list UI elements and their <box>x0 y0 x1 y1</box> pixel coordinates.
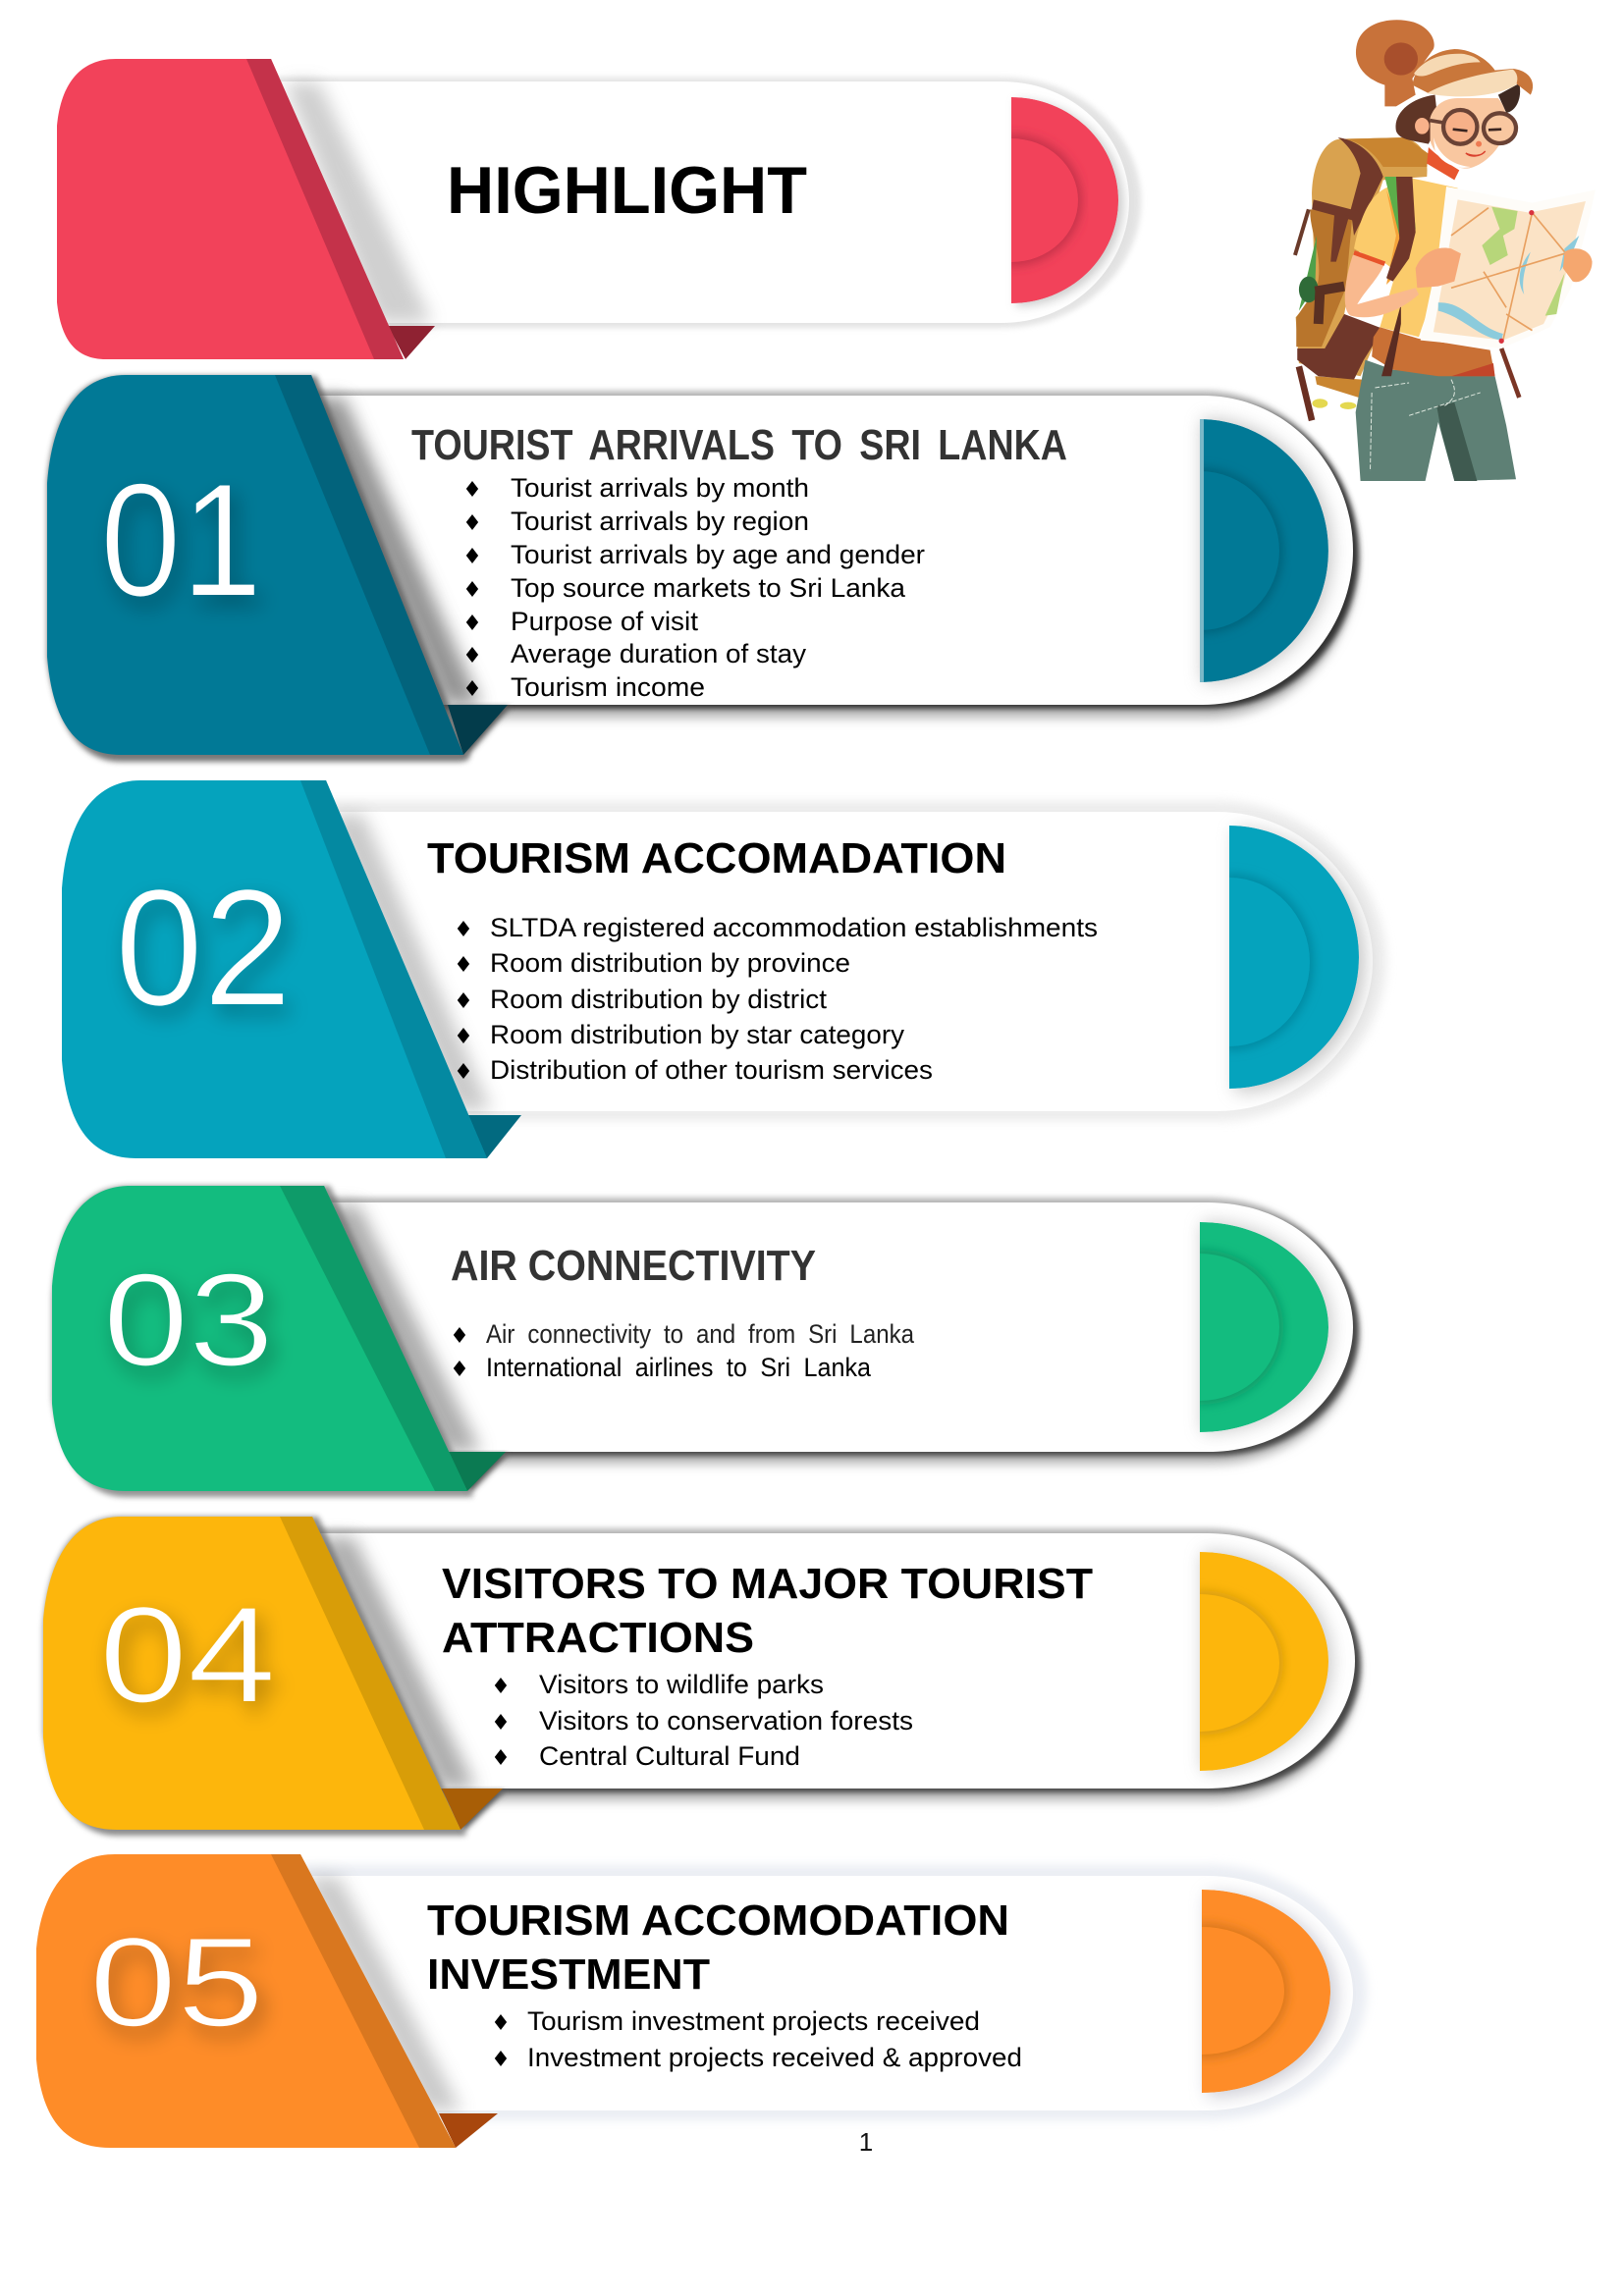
hands <box>1416 247 1593 288</box>
half disc: teal <box>1200 419 1328 682</box>
list: tourist arrivals: ♦ <box>462 478 482 503</box>
panel: 03 air connectivity <box>52 1186 1359 1497</box>
list: tourist arrivals: ♦ <box>462 545 482 569</box>
list: tourist arrivals: Top source markets to Sri Lanka <box>511 573 906 603</box>
heading: major tourist attractions <box>442 1560 1093 1662</box>
head with bun, hat and glasses <box>1356 20 1533 180</box>
list: accommodation investment: Investment projects received & approved <box>527 2043 1022 2072</box>
heading: accommodation investment: TOURISM ACCOMODATION <box>427 1896 1009 1945</box>
list: tourism accommodation: Distribution of other tourism services <box>490 1055 933 1085</box>
tab: yellow <box>43 1517 460 1830</box>
list: tourist arrivals: Tourist arrivals by region <box>511 507 809 536</box>
list: tourist arrivals: ♦ <box>462 644 482 668</box>
list: air connectivity <box>450 1319 915 1382</box>
list: tourist arrivals: Purpose of visit <box>511 607 699 636</box>
list: tourism accommodation: ♦ <box>454 918 473 942</box>
half disc: orange <box>1202 1890 1330 2093</box>
tab: orange <box>36 1854 456 2148</box>
shirt and belt <box>1345 177 1519 398</box>
list: accommodation investment: ♦ <box>491 2011 511 2036</box>
list: accommodation investment <box>491 2006 1022 2072</box>
number: 04: 04 <box>99 1577 276 1732</box>
tab: cyan <box>62 780 487 1158</box>
list: major tourist attractions <box>491 1670 913 1771</box>
heading: major tourist attractions: VISITORS TO MAJOR TOURIST <box>442 1560 1093 1608</box>
list: tourist arrivals: ♦ <box>462 511 482 536</box>
list: tourism accommodation: Room distribution by province <box>490 948 850 978</box>
number: 03: 03 <box>103 1246 274 1394</box>
number: 05: 05 <box>89 1910 264 2054</box>
panel: highlight banner <box>57 59 1141 359</box>
panel: 05 accommodation investment <box>36 1854 1367 2148</box>
list: accommodation investment: Tourism investment projects received <box>527 2006 980 2036</box>
list: tourism accommodation: ♦ <box>454 1025 473 1049</box>
list: major tourist attractions: Central Cultural Fund <box>539 1741 800 1771</box>
list: tourist arrivals: Average duration of stay <box>511 639 806 668</box>
number: 02: 02 <box>115 855 292 1041</box>
tab: green <box>52 1186 467 1491</box>
map <box>1421 187 1596 348</box>
list: tourist arrivals <box>462 473 925 702</box>
list: accommodation investment: ♦ <box>491 2048 511 2072</box>
list: tourism accommodation: Room distribution by star category <box>490 1020 905 1049</box>
list: tourism accommodation: SLTDA registered accommodation establishments <box>490 913 1098 942</box>
list: air connectivity: Air connectivity to and from Sri Lanka <box>486 1319 915 1349</box>
list: tourist arrivals: ♦ <box>462 677 482 702</box>
tab: red <box>57 59 404 359</box>
heading: accommodation investment: INVESTMENT <box>427 1950 710 1999</box>
half disc: cyan <box>1229 826 1359 1089</box>
list: tourist arrivals: ♦ <box>462 612 482 636</box>
backpack <box>1295 137 1429 420</box>
list: tourist arrivals: Tourist arrivals by age and gender <box>511 540 925 569</box>
list: tourism accommodation: Room distribution by district <box>490 985 828 1014</box>
list: major tourist attractions: ♦ <box>491 1675 511 1699</box>
list: major tourist attractions: ♦ <box>491 1746 511 1771</box>
heading: tourist arrivals: TOURIST ARRIVALS TO SRI LANKA <box>411 421 1067 469</box>
trousers <box>1356 360 1516 481</box>
heading: major tourist attractions: ATTRACTIONS <box>442 1614 754 1662</box>
list: air connectivity: International airlines to Sri Lanka <box>486 1353 872 1382</box>
half disc: red <box>1011 97 1118 303</box>
tab: teal <box>47 375 463 755</box>
list: air connectivity: ♦ <box>450 1358 469 1382</box>
panel: 01 tourist arrivals <box>47 375 1359 762</box>
list: tourism accommodation <box>454 913 1098 1085</box>
heading: accommodation investment <box>427 1896 1009 1999</box>
list: major tourist attractions: Visitors to conservation forests <box>539 1706 913 1735</box>
panel: 02 tourism accommodation <box>62 780 1386 1158</box>
page number: 1 <box>859 2127 873 2157</box>
half disc: green <box>1200 1222 1328 1432</box>
list: tourist arrivals: ♦ <box>462 578 482 603</box>
list: major tourist attractions: Visitors to wildlife parks <box>539 1670 824 1699</box>
heading: tourism accommodation: TOURISM ACCOMADATION <box>427 834 1006 882</box>
heading: air connectivity: AIR CONNECTIVITY <box>451 1242 816 1290</box>
list: tourism accommodation: ♦ <box>454 989 473 1014</box>
heading: highlight: HIGHLIGHT <box>447 153 807 228</box>
number: 01: 01 <box>100 450 262 630</box>
list: tourism accommodation: ♦ <box>454 1060 473 1085</box>
list: air connectivity: ♦ <box>450 1324 469 1349</box>
list: tourist arrivals: Tourist arrivals by month <box>511 473 809 503</box>
list: major tourist attractions: ♦ <box>491 1711 511 1735</box>
list: tourist arrivals: Tourism income <box>511 672 705 702</box>
panel: 04 major tourist attractions <box>43 1517 1361 1836</box>
half disc: yellow <box>1200 1552 1328 1771</box>
list: tourism accommodation: ♦ <box>454 953 473 978</box>
icon: traveller with backpack reading a map <box>1295 20 1596 481</box>
